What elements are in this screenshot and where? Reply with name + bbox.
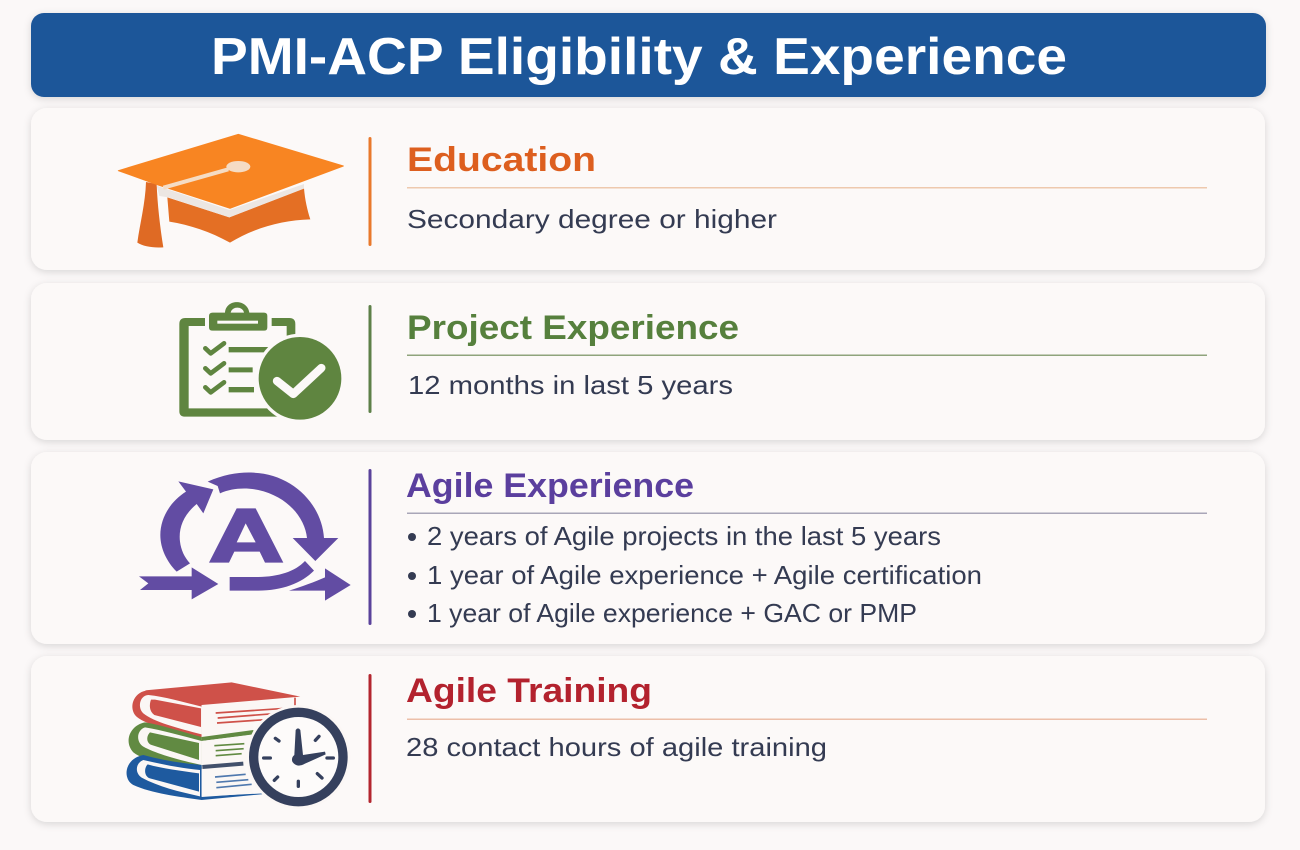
bullet list: 1 year of Agile experience + Agile certification [427, 560, 982, 590]
heading: education: Education [407, 141, 596, 179]
icon: books and clock [127, 682, 350, 809]
clock [246, 705, 350, 809]
bullet list: 2 years of Agile projects in the last 5 years [427, 521, 941, 551]
divider [368, 674, 372, 803]
panel: education [31, 108, 1265, 270]
title banner [31, 13, 1266, 97]
panel: agile training [31, 656, 1265, 822]
panel: agile experience [31, 452, 1265, 644]
panel: project experience [31, 283, 1265, 440]
bullet list: 1 year of Agile experience + GAC or PMP [427, 598, 917, 628]
red book [132, 682, 300, 738]
divider [368, 137, 372, 246]
divider [368, 305, 372, 413]
icon: agile cycle [139, 473, 351, 601]
icon: graduation cap [118, 134, 343, 247]
divider [368, 469, 372, 625]
icon: clipboard with check [179, 302, 345, 423]
heading: project experience: Project Experience [407, 309, 739, 347]
title: PMI-ACP Eligibility & Experience [211, 28, 1067, 86]
text: project requirement: 12 months in last 5 years [408, 370, 733, 400]
bullet list [408, 521, 982, 628]
text: education requirement: Secondary degree or higher [407, 204, 777, 234]
heading: agile experience: Agile Experience [406, 467, 694, 505]
green book [129, 722, 255, 770]
blue book [127, 755, 272, 800]
text: training requirement: 28 contact hours of agile training [406, 732, 827, 762]
heading: agile training: Agile Training [406, 672, 652, 710]
